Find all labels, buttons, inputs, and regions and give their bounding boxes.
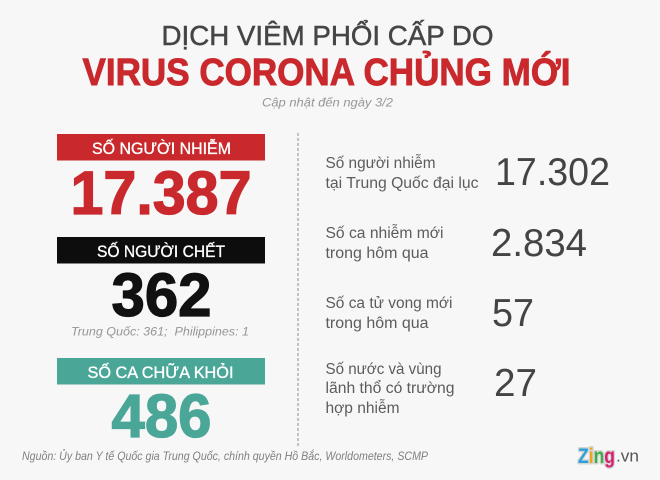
value: 2.834 [491,222,587,265]
infected label: SỐ NGƯỜI NHIỄM [92,138,231,158]
value: 17.302 [495,151,610,194]
logo: Zing.vn [578,445,639,468]
update date: Cập nhật đến ngày 3/2 [262,96,393,110]
infected number: 17.387 [70,159,252,227]
value: 57 [492,292,534,335]
deaths number: 362 [112,261,212,329]
recovered label: SỐ CA CHỮA KHỎI [88,362,234,382]
recovered number: 486 [112,382,212,450]
label: Số nước và vùng [326,361,442,378]
title line 2: VIRUS CORONA CHỦNG MỚI [82,50,570,94]
label: hợp nhiễm [326,400,400,417]
deaths label: SỐ NGƯỜI CHẾT [97,241,225,261]
deaths label [57,237,265,264]
label: lãnh thổ có trường [326,380,454,397]
label: Số người nhiễm [326,155,436,172]
deaths breakdown: Trung Quốc: 361; Philippines: 1 [71,324,249,338]
panel: recovered [57,358,265,450]
label: Số ca tử vong mới [326,295,452,312]
label: Số ca nhiễm mới [326,225,444,242]
infected label [57,134,265,160]
logo outline: Zing [578,445,615,468]
stat: mainland cases [326,151,610,194]
stat: countries [326,361,537,417]
panel: infected [57,134,265,227]
title line 1: DỊCH VIÊM PHỔI CẤP DO [162,20,494,51]
logo letters: Zing [578,445,615,468]
stat: new deaths [326,292,534,335]
label: trong hôm qua [326,315,429,332]
panel: deaths [57,237,265,338]
logo domain: .vn [616,446,639,466]
stat: new cases [326,222,587,265]
source: Nguồn: Ủy ban Y tế Quốc gia Trung Quốc, chính quyền Hồ Bắc, Worldometers, SCMP [22,448,428,463]
label: trong hôm qua [326,245,429,262]
label: tại Trung Quốc đại lục [326,175,479,192]
value: 27 [494,362,537,405]
title [82,20,570,94]
recovered label [57,358,265,384]
